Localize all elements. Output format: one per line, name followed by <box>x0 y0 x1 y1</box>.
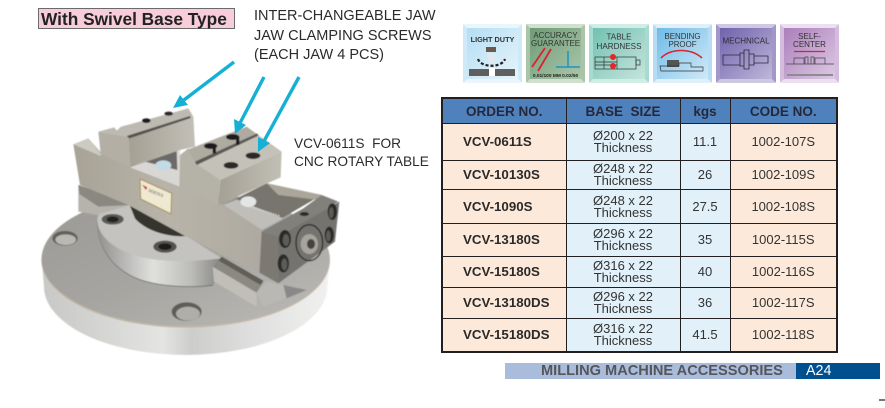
row: VCV-1090S: VCV-1090S <box>463 198 532 214</box>
icon: accuracy guarantee: 0.01/100 MM 0.02/50 <box>533 73 578 79</box>
callout text: model note: VCV-0611S FOR <box>294 136 401 151</box>
row: VCV-1090S: 27.5 <box>692 198 718 214</box>
row: VCV-15180DS: 41.5 <box>692 327 718 342</box>
row: VCV-13180S: 35 <box>698 232 712 247</box>
callout text: model note: CNC ROTARY TABLE <box>294 154 429 169</box>
row: VCV-10130S: VCV-10130S <box>463 167 540 182</box>
icon: table hardness <box>589 24 649 83</box>
icon: self-center: CENTER <box>793 40 826 49</box>
icon: accuracy guarantee: ACCURACY <box>533 31 578 40</box>
callout text: jaw and screws: JAW CLAMPING SCREWS <box>254 28 432 44</box>
row: VCV-10130S: 1002-109S <box>751 167 815 182</box>
footer label: MILLING MACHINE ACCESSORIES <box>541 363 783 379</box>
row: VCV-1090S: 1002-108S <box>751 198 815 214</box>
product photo: vise on swivel base <box>40 108 340 356</box>
arrows pointing to jaw and screws <box>173 60 300 152</box>
row: VCV-15180S: 40 <box>698 264 712 279</box>
icon: self-center <box>780 24 839 83</box>
right jaw <box>179 127 282 205</box>
row: VCV-13180S: VCV-13180S <box>463 232 540 247</box>
heading: With Swivel Base Type <box>41 9 227 29</box>
callout text: jaw and screws: INTER-CHANGEABLE JAW <box>254 8 436 24</box>
row: VCV-13180S <box>443 224 836 256</box>
page number <box>796 363 880 379</box>
brand label: SERTEX <box>148 188 165 199</box>
row: VCV-0611S: VCV-0611S <box>463 134 532 149</box>
row: VCV-13180S: Ø296 x 22 <box>593 226 653 241</box>
guide key <box>78 185 307 307</box>
row: VCV-15180DS: VCV-15180DS <box>463 327 549 342</box>
icon: table hardness: HARDNESS <box>597 42 642 51</box>
vise body <box>73 138 322 273</box>
icon: mechnical <box>716 24 776 83</box>
icon: bending proof: PROOF <box>668 40 697 49</box>
row: VCV-0611S: Ø200 x 22 <box>593 128 653 143</box>
row: VCV-1090S <box>443 190 836 223</box>
swivel boss <box>97 200 222 287</box>
icon: accuracy guarantee: GUARANTEE <box>531 39 580 48</box>
icon: bending proof <box>653 24 712 83</box>
arrow: to right jaw screw <box>258 77 299 152</box>
row: VCV-15180S: Thickness <box>594 270 652 285</box>
row: VCV-10130S <box>443 161 836 189</box>
row: VCV-1090S: Ø248 x 22 <box>593 192 653 208</box>
icon: light duty <box>463 24 522 83</box>
icon: mechnical: MECHNICAL <box>722 36 770 46</box>
row: VCV-15180S: 1002-116S <box>752 264 815 279</box>
callout text: jaw and screws: (EACH JAW 4 PCS) <box>254 47 384 63</box>
round base plate <box>41 192 330 355</box>
row: VCV-0611S: 1002-107S <box>751 134 815 149</box>
row: VCV-15180DS: Ø316 x 22 <box>593 321 653 336</box>
row: VCV-10130S: 26 <box>698 167 712 182</box>
callout text: jaw and screws <box>254 8 436 63</box>
icon: self-center: SELF- <box>798 32 821 41</box>
end plate <box>259 195 339 283</box>
callout text: model note <box>294 136 429 169</box>
arrow: to left jaw <box>173 62 234 108</box>
footer section bar <box>505 363 880 379</box>
left jaw <box>98 108 195 167</box>
row: VCV-15180S <box>443 257 836 287</box>
table header row: BASE SIZE <box>585 104 660 118</box>
row: VCV-13180DS: Thickness <box>594 301 652 316</box>
row: VCV-15180DS <box>443 319 836 351</box>
row: VCV-13180DS <box>443 288 836 318</box>
page number: A24 <box>806 363 831 379</box>
row: VCV-15180DS: 1002-118S <box>752 327 815 342</box>
row: VCV-13180DS: 36 <box>698 295 712 310</box>
row: VCV-0611S: Thickness <box>594 140 652 155</box>
row: VCV-13180DS: Ø296 x 22 <box>593 289 653 304</box>
table header row: ORDER NO. <box>466 104 542 118</box>
row: VCV-10130S: Ø248 x 22 <box>593 161 653 176</box>
row: VCV-15180S: Ø316 x 22 <box>593 258 653 273</box>
row: VCV-1090S: Thickness <box>594 204 652 220</box>
feature icons row <box>463 24 839 83</box>
row: VCV-15180DS: Thickness <box>594 333 652 348</box>
row: VCV-13180DS: VCV-13180DS <box>463 295 549 310</box>
table header row: CODE NO. <box>750 104 817 118</box>
icon: light duty: LIGHT DUTY <box>471 35 515 44</box>
table header row <box>443 99 836 351</box>
row: VCV-0611S <box>443 124 836 160</box>
icon: bending proof: BENDING <box>665 32 700 41</box>
row: VCV-13180S: Thickness <box>594 238 652 253</box>
specification table <box>441 97 838 352</box>
icon: table hardness: TABLE <box>606 32 632 42</box>
table header row: kgs <box>693 104 717 118</box>
row: VCV-0611S: 11.1 <box>693 134 717 149</box>
brand label <box>140 179 172 214</box>
arrow: to jaw screw <box>234 77 264 134</box>
row: VCV-13180DS: 1002-117S <box>752 295 815 310</box>
icon: accuracy guarantee <box>526 24 585 83</box>
row: VCV-13180S: 1002-115S <box>752 232 815 247</box>
row: VCV-10130S: Thickness <box>594 173 652 188</box>
row: VCV-15180S: VCV-15180S <box>463 264 540 279</box>
